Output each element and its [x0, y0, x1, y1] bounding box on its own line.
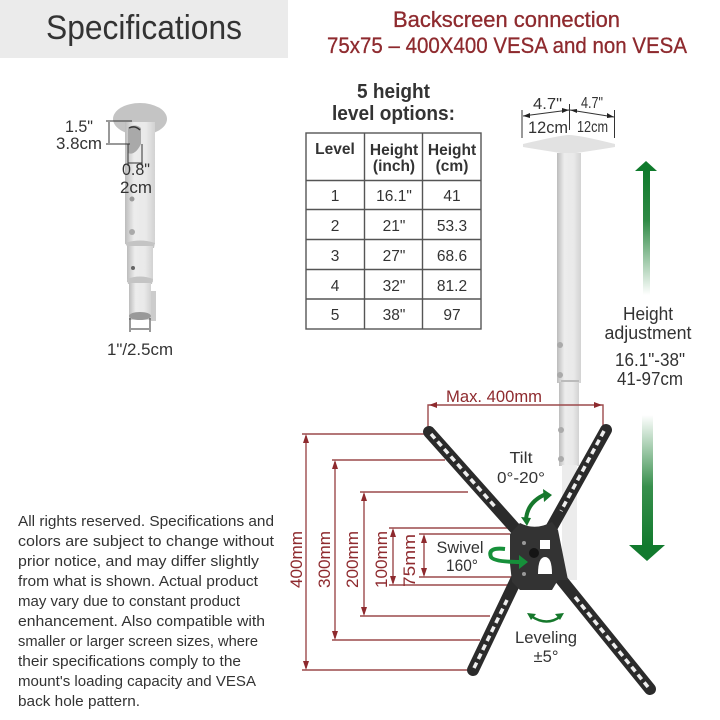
icon: tilt arrow	[526, 494, 546, 520]
disclaimer text: prior notice, and may differ slightly	[18, 553, 260, 570]
disclaimer text: colors are subject to change without	[18, 533, 275, 550]
dimension labels: 3.8cm	[56, 134, 102, 153]
height adjustment label	[604, 304, 692, 389]
leveling label	[515, 628, 577, 666]
dimension labels: 300mm	[315, 531, 334, 588]
swivel label	[436, 538, 484, 575]
height adjustment label: 16.1"-38"	[615, 350, 685, 370]
plate width dimensions: 12cm	[528, 118, 568, 137]
disclaimer text: enhancement. Also compatible with	[18, 613, 265, 630]
dimension labels: 100mm	[372, 531, 391, 588]
upper pole	[557, 153, 581, 383]
dimension labels: Max. 400mm	[446, 387, 542, 406]
disclaimer text: their specifications comply to the	[18, 653, 241, 670]
leveling label: ±5°	[534, 647, 558, 666]
disclaimer text: smaller or larger screen sizes, where	[18, 633, 258, 650]
arrow: height up	[635, 161, 657, 295]
icon: leveling arrow	[527, 613, 564, 622]
dimension labels: 2cm	[120, 178, 152, 197]
arm slots	[431, 431, 648, 687]
heading: Specifications banner	[0, 0, 288, 58]
disclaimer text: mount's loading capacity and VESA	[18, 673, 256, 690]
disclaimer text	[18, 513, 275, 710]
dimension labels	[287, 387, 542, 588]
heading: backscreen connection: 75x75 – 400X400 VESA and non VESA	[327, 33, 687, 58]
slot	[128, 126, 141, 154]
table: height levels: 27"	[383, 248, 405, 265]
height adjustment label: 41-97cm	[617, 369, 683, 389]
table: height levels: (inch)	[373, 158, 415, 175]
disclaimer text: may vary due to constant product	[18, 593, 241, 610]
table: height levels: Height	[370, 142, 418, 159]
table: height levels: 2	[331, 218, 339, 235]
tilt label: Tilt	[510, 450, 533, 467]
left tube detail diagram	[56, 103, 173, 359]
table: height levels: Level	[315, 141, 355, 158]
upper tube	[125, 122, 155, 244]
table: height levels: 81.2	[437, 278, 467, 295]
icon: swivel arrow	[490, 549, 528, 569]
table: height levels: 53.3	[437, 218, 467, 235]
dimension labels: 200mm	[343, 531, 362, 588]
vertical VESA dimensions	[302, 402, 603, 670]
VESA X bracket	[429, 430, 650, 689]
table: height levels: 68.6	[437, 248, 467, 265]
table: height levels	[306, 133, 481, 329]
heading: 5 height level options: 5 height	[357, 81, 430, 103]
table: height levels: 16.1"	[376, 188, 412, 205]
heading: 5 height level options	[332, 81, 455, 125]
table: height levels: Height	[428, 142, 476, 159]
disclaimer text: All rights reserved. Specifications and	[18, 513, 274, 530]
bracket arms	[429, 430, 650, 689]
height adjustment label: adjustment	[604, 323, 692, 343]
dimension labels: 1"/2.5cm	[107, 340, 173, 359]
table: height levels: 32"	[383, 278, 405, 295]
heading: Specifications banner: Specifications	[46, 9, 242, 47]
swivel label: Swivel	[436, 538, 484, 557]
heading: backscreen connection: Backscreen connection	[393, 7, 620, 32]
table: height levels: 21"	[383, 218, 405, 235]
swivel label: 160°	[446, 556, 478, 575]
table: height levels: 4	[331, 278, 340, 295]
lower pole	[562, 465, 577, 580]
dimension labels: 400mm	[287, 531, 306, 588]
lower tube	[129, 283, 151, 320]
table: height levels: (cm)	[436, 158, 468, 175]
icon: tilt arrow head	[521, 489, 552, 526]
table: height levels: 41	[443, 188, 461, 205]
dimension labels: 1.5"	[65, 117, 93, 136]
table: height levels: 38"	[383, 307, 405, 324]
ceiling mount pole	[523, 135, 615, 580]
ceiling disc	[113, 103, 167, 135]
leveling label: Leveling	[515, 628, 577, 647]
dimension labels	[56, 117, 173, 359]
height adjustment label: Height	[623, 304, 673, 324]
table: height levels: 1	[331, 188, 339, 205]
arrow: height down	[629, 415, 665, 561]
disclaimer text: back hole pattern.	[18, 693, 140, 710]
ceiling plate	[523, 135, 615, 154]
center plate	[510, 522, 568, 590]
plate width dimensions: 4.7"	[533, 96, 562, 113]
table: height levels: 5	[331, 307, 339, 324]
middle tube	[125, 240, 155, 248]
middle pole	[559, 382, 579, 466]
disclaimer text: from what is shown. Actual product	[18, 573, 259, 590]
plate width dimensions: 4.7"	[581, 95, 603, 112]
tilt label	[497, 450, 545, 487]
table: height levels: 3	[331, 248, 339, 265]
plate width dimensions: 12cm	[577, 119, 608, 136]
heading: backscreen connection	[327, 7, 687, 58]
dimension lines	[106, 121, 150, 332]
heading: 5 height level options: level options:	[332, 103, 455, 125]
dimension labels: 0.8"	[122, 160, 150, 179]
tilt label: 0°-20°	[497, 470, 545, 487]
plate width dimensions	[522, 95, 614, 138]
dimension labels: 75mm	[400, 534, 419, 587]
table: height levels: 97	[443, 307, 461, 324]
